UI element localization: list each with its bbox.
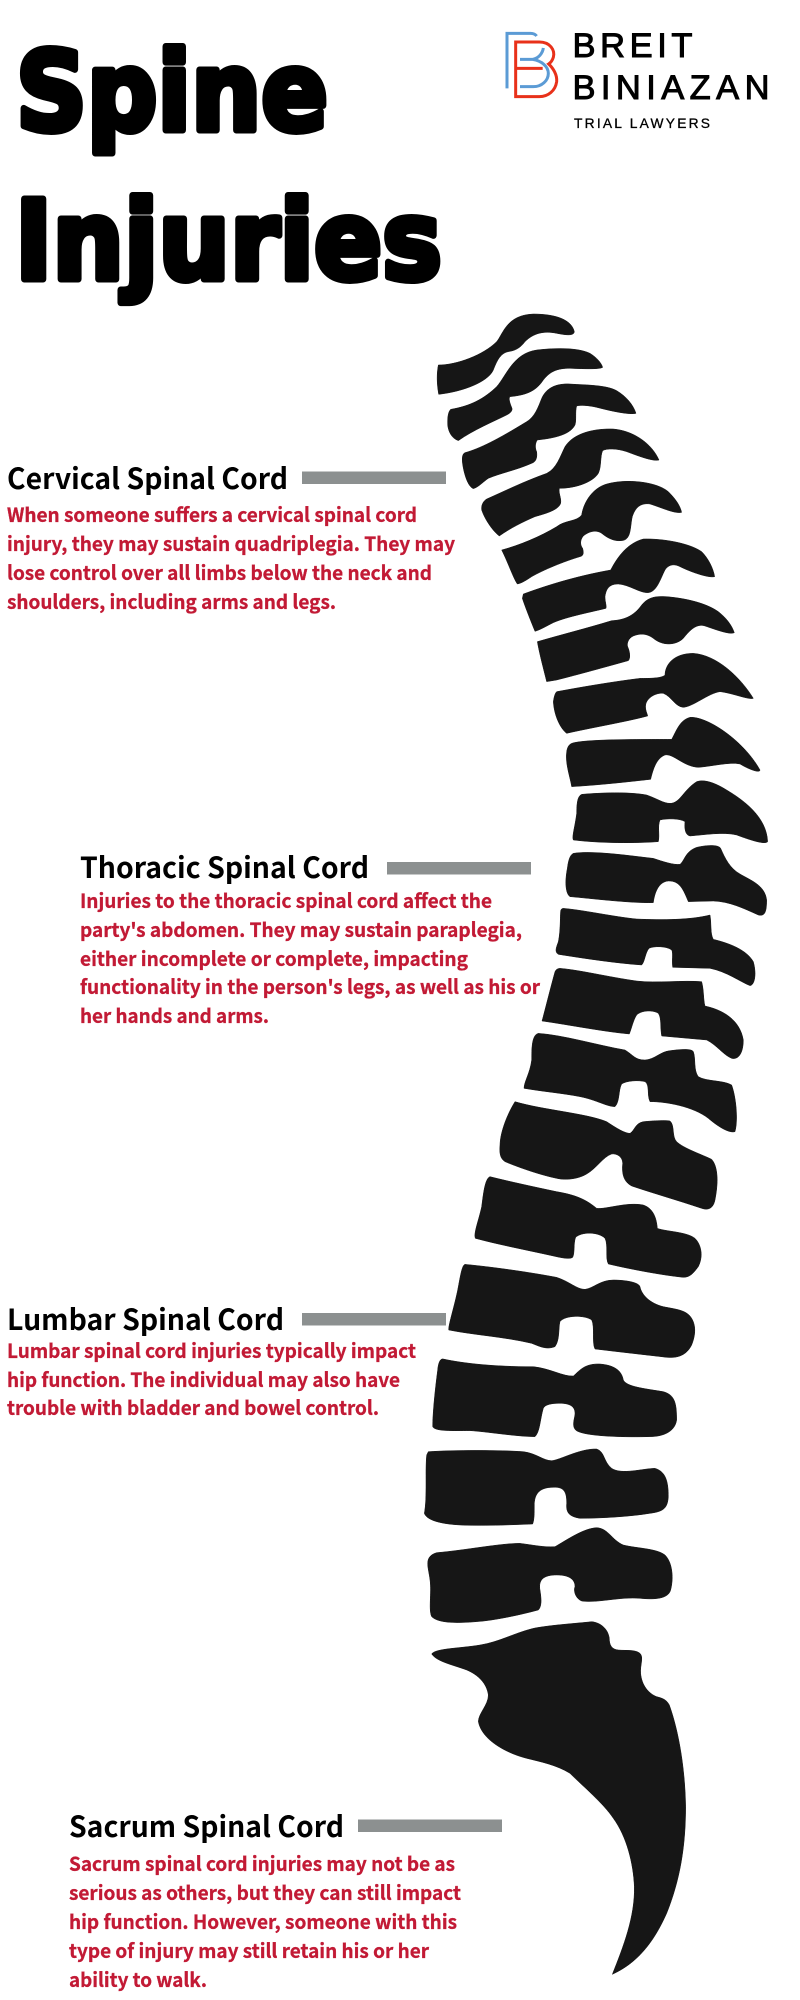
- panel: sacrum spinal cord: [69, 1804, 502, 1993]
- text block: thoracic: her hands and arms.: [80, 1000, 269, 1029]
- text block: cervical: lose control over all limbs below the neck and: [7, 557, 432, 586]
- icon: BB monogram: [507, 33, 557, 97]
- panel: cervical spinal cord: [7, 456, 455, 615]
- title: Spine: [16, 28, 328, 156]
- heading: lumbar: Lumbar Spinal Cord: [7, 1297, 284, 1339]
- panel: lumbar spinal cord: [7, 1297, 446, 1421]
- logo wordmark: TRIAL LAWYERS: [574, 116, 710, 131]
- heading: sacrum: Sacrum Spinal Cord: [69, 1804, 344, 1846]
- cervical vertebrae: [437, 314, 753, 733]
- logo wordmark: [572, 27, 770, 131]
- lumbar vertebrae: [424, 1102, 717, 1623]
- panel: thoracic spinal cord: [80, 845, 540, 1029]
- text block: cervical: [7, 499, 455, 615]
- text block: thoracic: [80, 885, 540, 1029]
- logo wordmark: BREIT: [572, 27, 692, 65]
- text block: lumbar: hip function. The individual may also have: [7, 1364, 400, 1393]
- text block: sacrum: hip function. However, someone with this: [69, 1906, 457, 1935]
- text block: sacrum: ability to walk.: [69, 1964, 207, 1993]
- logo: [507, 27, 770, 131]
- text block: cervical: When someone suffers a cervical spinal cord: [7, 499, 417, 528]
- thoracic vertebrae: [524, 717, 768, 1132]
- connector bar: thoracic: [387, 862, 531, 874]
- heading: cervical: Cervical Spinal Cord: [7, 456, 288, 498]
- heading: thoracic: Thoracic Spinal Cord: [80, 845, 369, 887]
- text block: thoracic: either incomplete or complete, impacting: [80, 943, 468, 972]
- text block: lumbar: Lumbar spinal cord injuries typically impact: [7, 1335, 416, 1364]
- text block: sacrum: serious as others, but they can still impact: [69, 1877, 461, 1906]
- text block: sacrum: [69, 1848, 461, 1993]
- connector bar: lumbar: [302, 1313, 446, 1326]
- text block: cervical: shoulders, including arms and legs.: [7, 586, 336, 615]
- text block: lumbar: [7, 1335, 416, 1421]
- text block: sacrum: Sacrum spinal cord injuries may not be as: [69, 1848, 455, 1877]
- logo wordmark: BINIAZAN: [572, 69, 770, 107]
- text block: thoracic: functionality in the person's legs, as well as his or: [80, 971, 540, 1000]
- connector bar: cervical: [302, 472, 446, 484]
- spine illustration: [424, 314, 768, 1974]
- text block: cervical: injury, they may sustain quadriplegia. They may: [7, 528, 455, 557]
- text block: sacrum: type of injury may still retain his or her: [69, 1935, 429, 1964]
- text block: thoracic: party's abdomen. They may sustain paraplegia,: [80, 914, 522, 943]
- connector bar: sacrum: [358, 1820, 502, 1832]
- sacrum and coccyx: [432, 1622, 686, 1974]
- text block: thoracic: Injuries to the thoracic spinal cord affect the: [80, 885, 492, 914]
- title: Injuries: [15, 177, 442, 305]
- title: [15, 28, 442, 305]
- text block: lumbar: trouble with bladder and bowel control.: [7, 1392, 379, 1421]
